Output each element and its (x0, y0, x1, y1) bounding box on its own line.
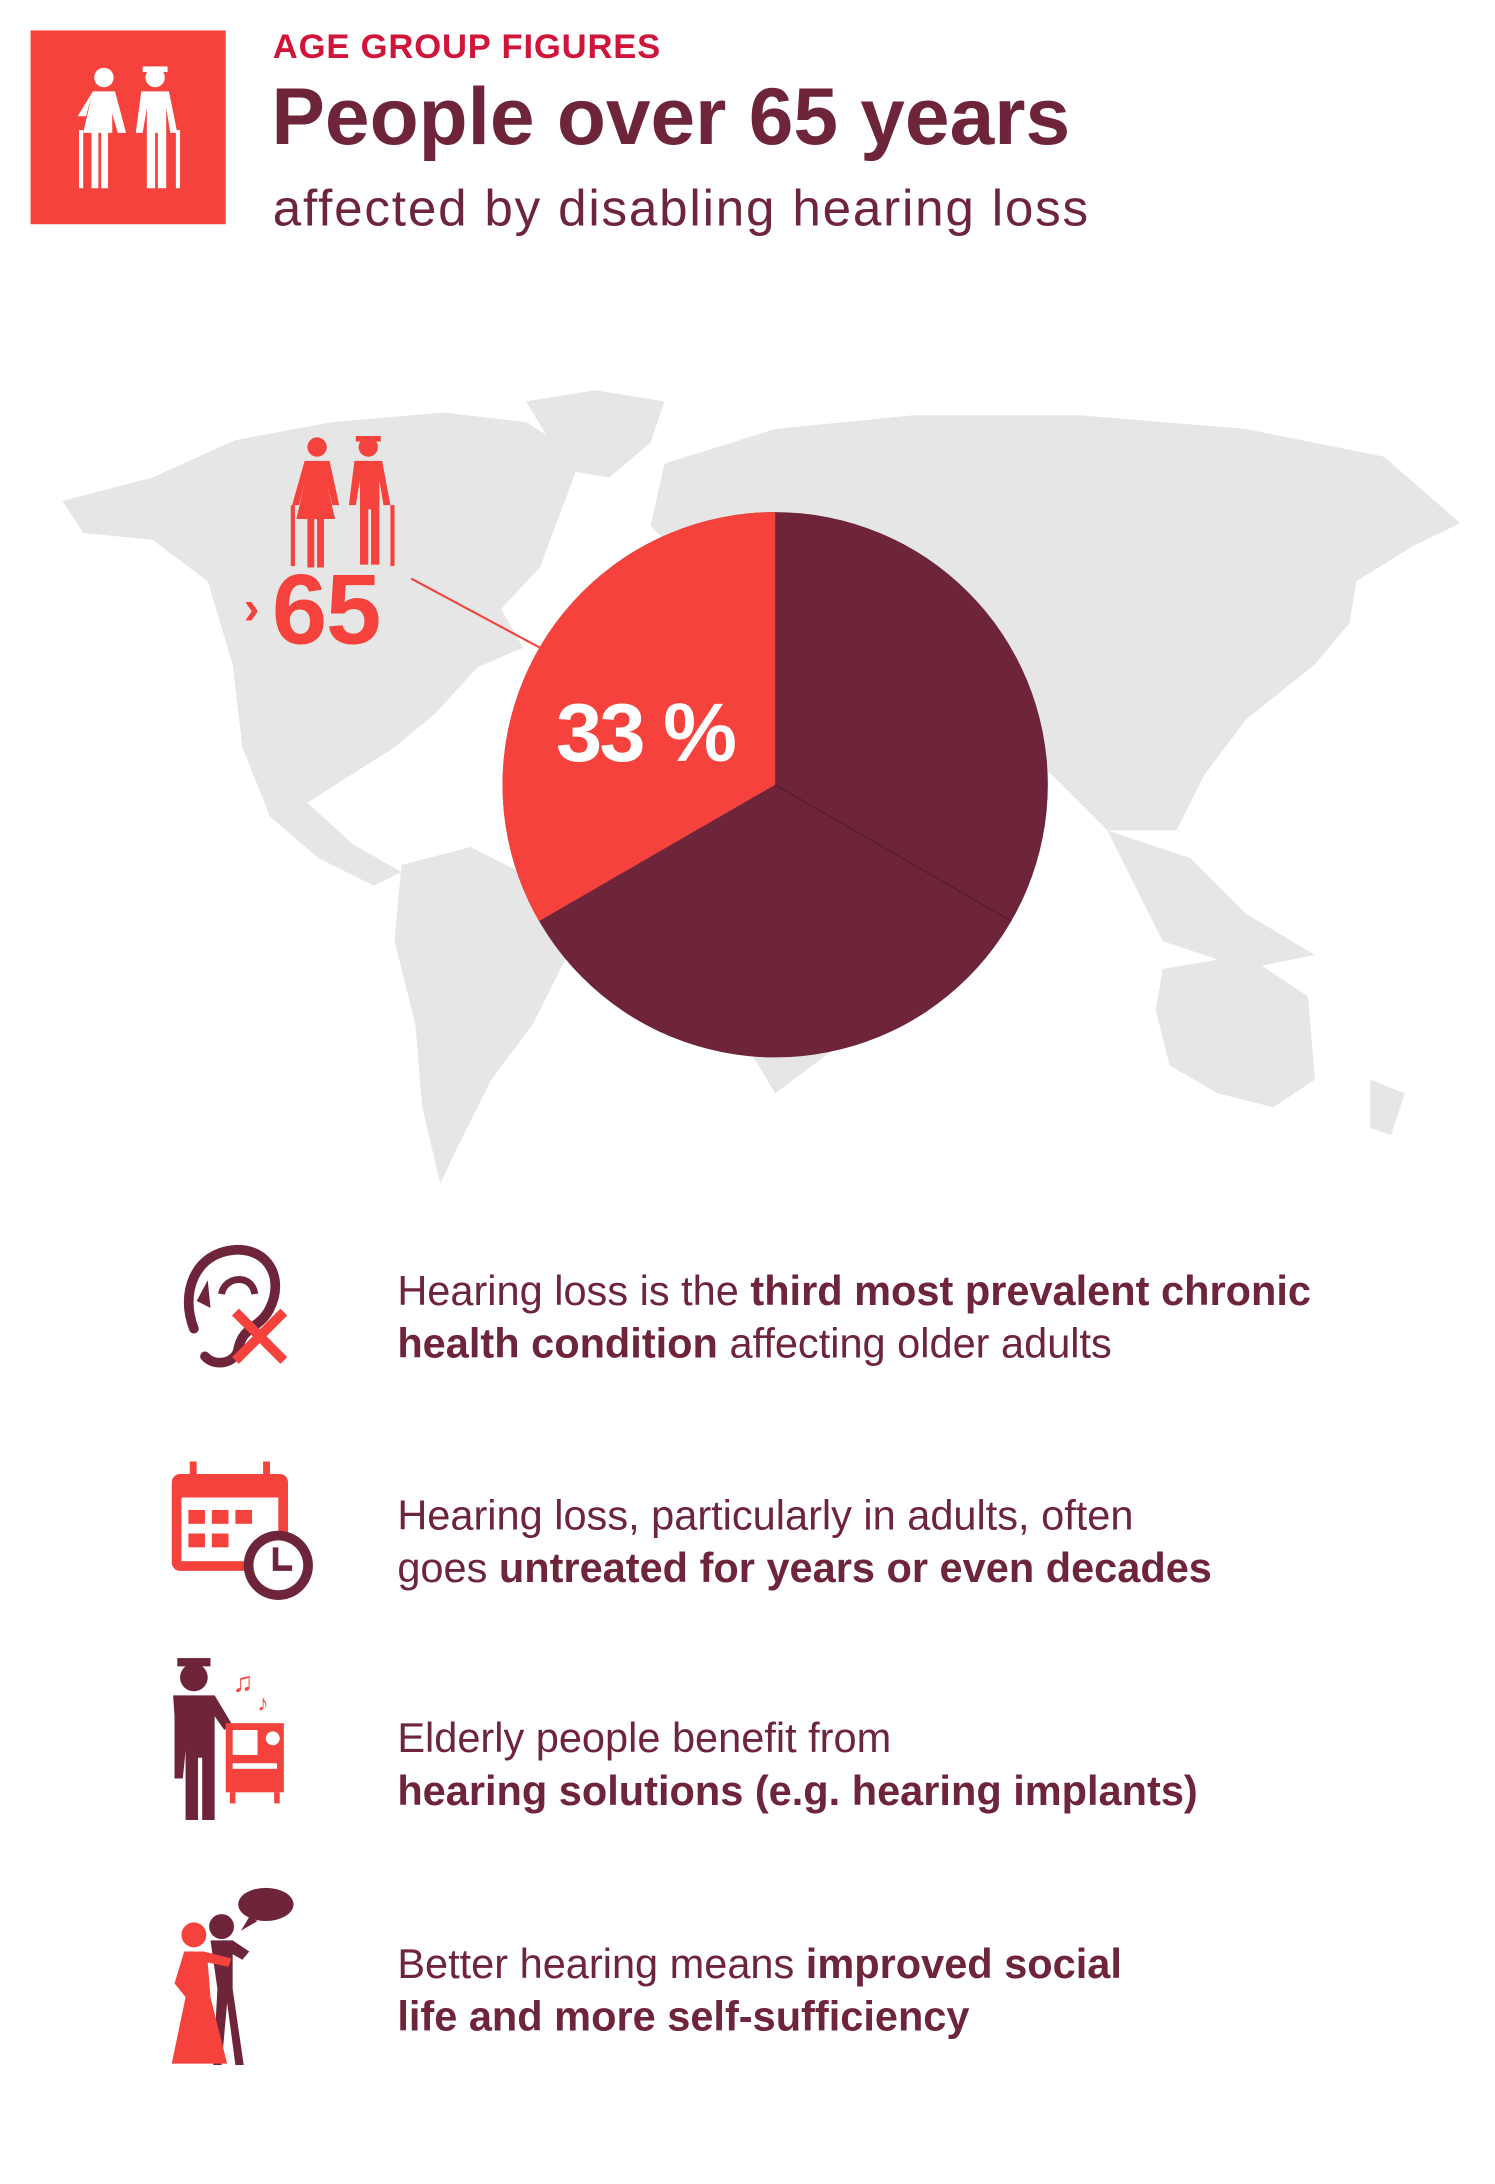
row 4: social life: life and more self-sufficiency (397, 1992, 970, 2039)
row 3: hearing solutions: hearing solutions (e.g. hearing implants) (397, 1767, 1198, 1814)
text: Hearing loss, particularly in adults, often (397, 1491, 1133, 1538)
text: Better hearing means improved social (397, 1940, 1122, 1987)
header label: AGE GROUP FIGURES (273, 28, 661, 66)
text: Hearing loss is the third most prevalent chronic (397, 1267, 1311, 1314)
icon: man with radio: ♪ (258, 1691, 269, 1716)
pie label: 33 % (556, 686, 735, 779)
row 1: chronic condition: health condition affecting older adults (397, 1320, 1112, 1367)
row 2: untreated: goes untreated for years or even decades (397, 1544, 1212, 1591)
pie chart (503, 512, 1048, 1057)
world map (62, 390, 1460, 1183)
subtitle: affected by disabling hearing loss (273, 180, 1090, 237)
header icon: elderly couple (31, 30, 226, 224)
row 3: hearing solutions (173, 1658, 1198, 1820)
icon: elderly couple over 65 (291, 436, 395, 567)
row 4: social life (172, 1888, 1122, 2065)
text: Elderly people benefit from (397, 1714, 891, 1761)
icon: man with radio: ♫ (233, 1666, 253, 1697)
label: over 65: › (244, 581, 258, 634)
row 2: untreated (172, 1462, 1212, 1600)
icon: dancing couple (172, 1888, 294, 2065)
label: over 65: 65 (272, 555, 380, 666)
icon: calendar with clock (172, 1462, 313, 1600)
title: People over 65 years (271, 72, 1070, 162)
icon: ear with x (189, 1250, 284, 1363)
row 1: chronic condition (189, 1250, 1311, 1367)
icon: man with radio (173, 1658, 284, 1820)
callout line (411, 579, 540, 648)
